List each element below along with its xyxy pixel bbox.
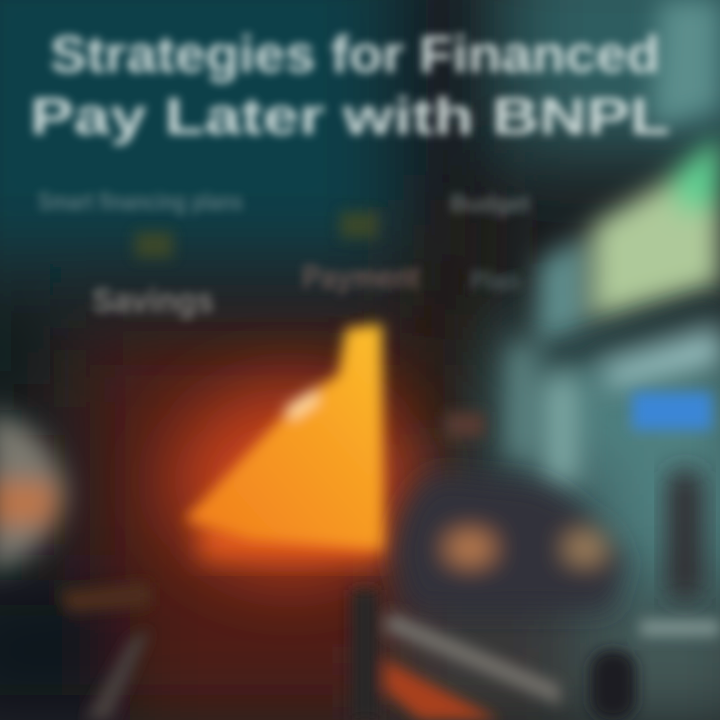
right green board — [538, 135, 720, 345]
pedestrian figure — [668, 470, 702, 600]
subtitle and labels: Plan — [470, 265, 520, 296]
blue sign — [632, 392, 712, 430]
title: Strategies for Financed — [50, 26, 660, 84]
road and foreground — [60, 412, 720, 720]
icons above labels — [135, 212, 378, 258]
orange glow — [170, 385, 410, 575]
orange growth triangle — [184, 324, 384, 550]
left sunset window — [0, 412, 66, 572]
subtitle and labels: Budget — [450, 190, 531, 218]
subtitle and labels: Payment — [302, 259, 420, 295]
car — [395, 475, 625, 610]
title: Pay Later with BNPL — [30, 88, 670, 146]
right building details — [510, 0, 720, 483]
orange base glow under triangle — [200, 520, 385, 560]
subtitle and labels — [38, 188, 531, 320]
subtitle and labels: Smart financing plans — [38, 188, 243, 216]
title — [30, 26, 670, 146]
subtitle and labels: Savings — [92, 282, 214, 320]
